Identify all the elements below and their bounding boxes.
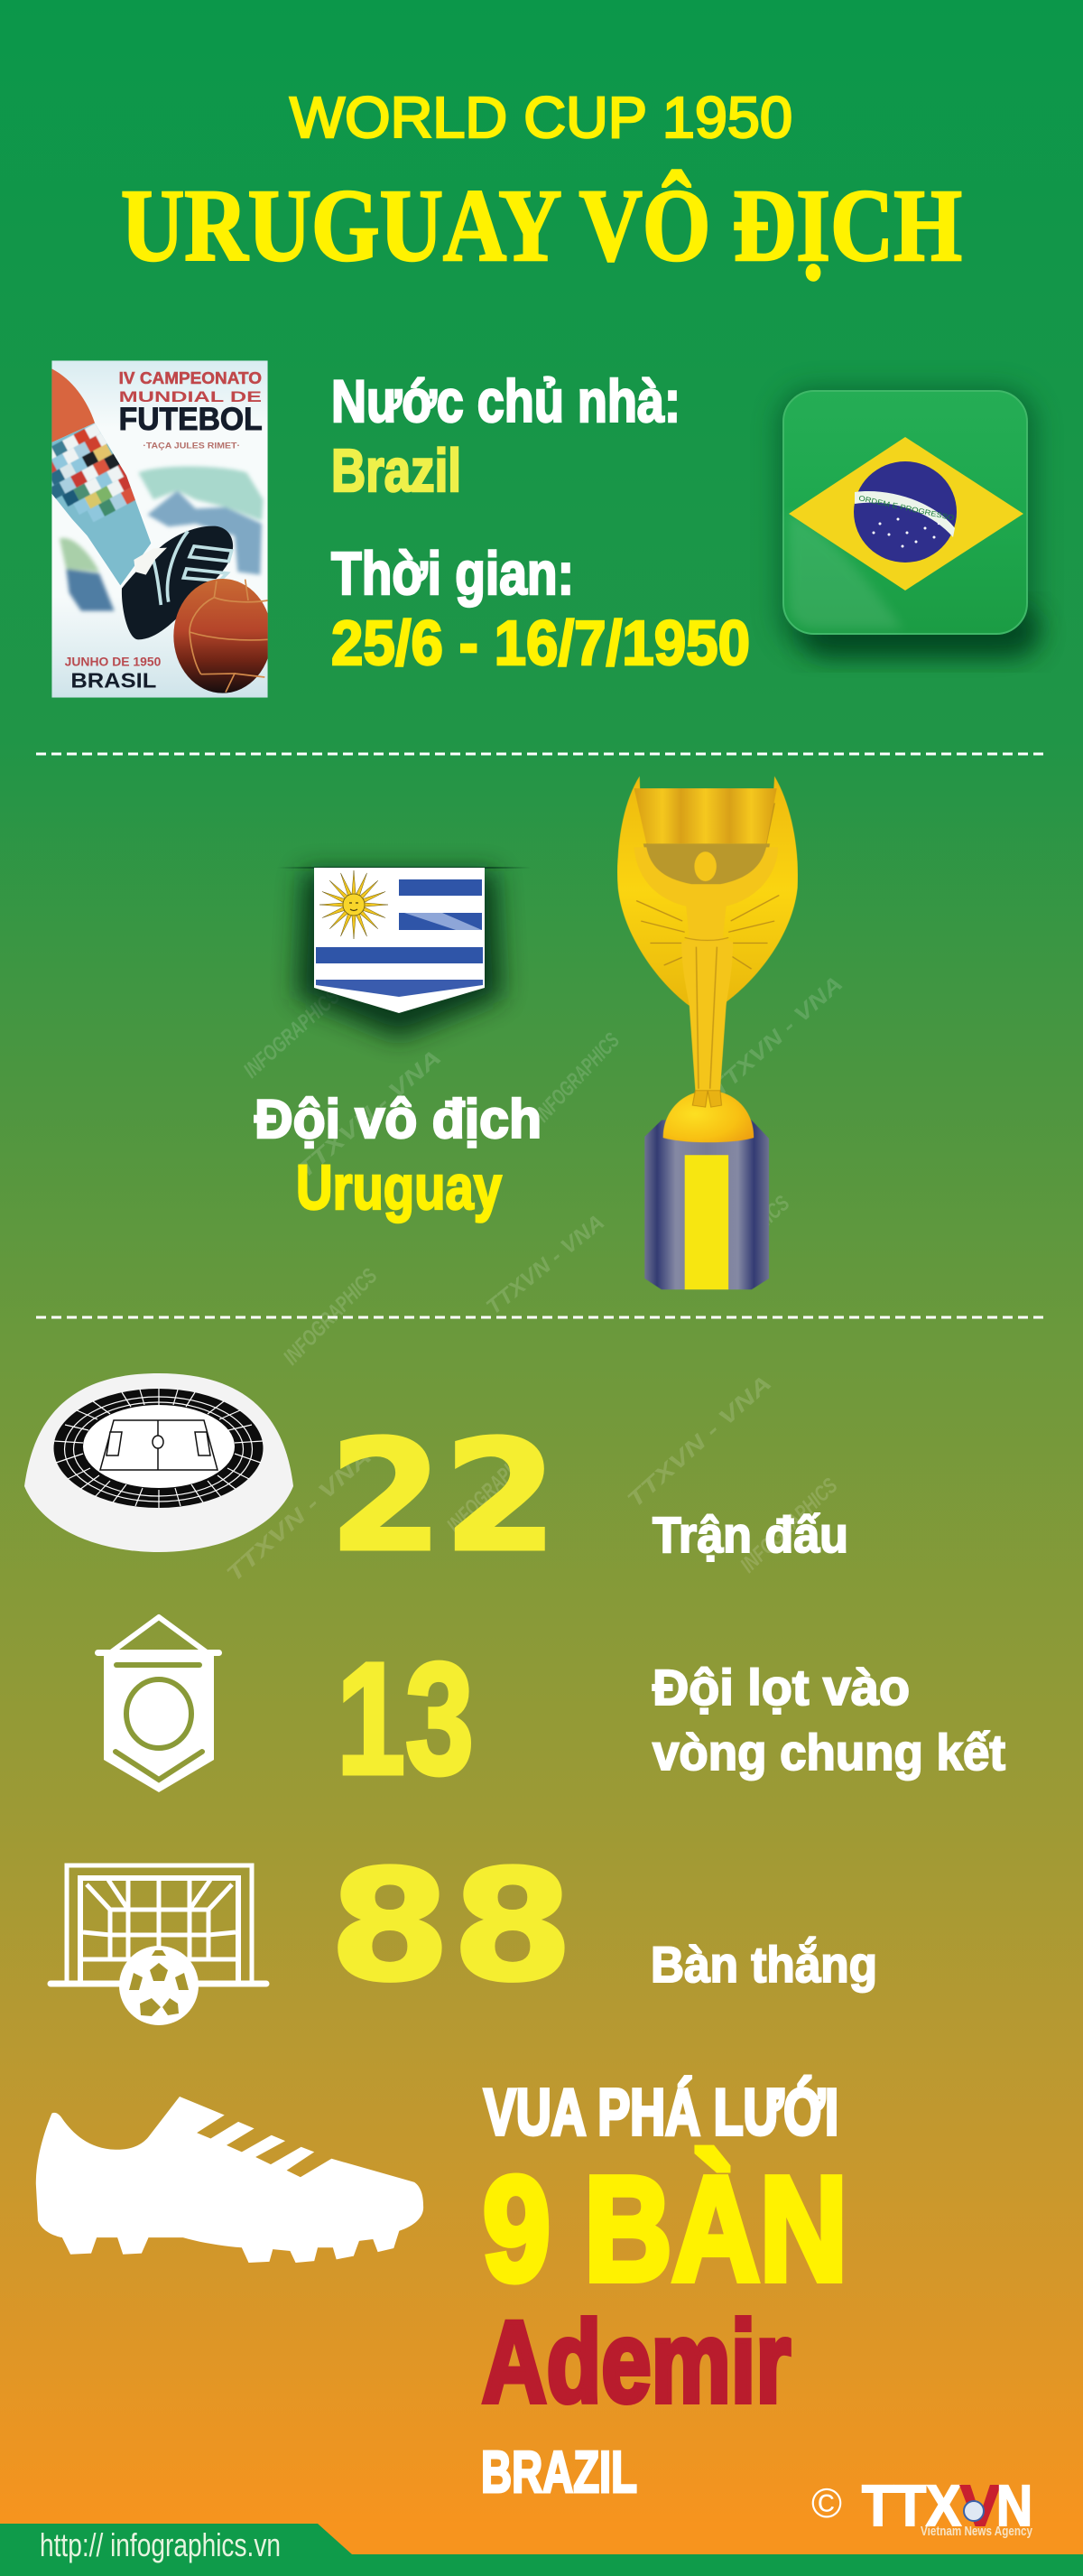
poster ball [173,579,272,693]
icon: football boot [36,2097,423,2263]
footer bar [0,2524,1083,2576]
player name: Ademir [482,2298,791,2427]
text block: champion [255,1089,542,1223]
watermarks: TTXVN - VNA [707,972,847,1102]
label: time: Thời gian: [331,540,574,608]
poster leg [51,368,95,442]
heading: top scorer: VUA PHÁ LƯỚI [484,2076,838,2149]
number: 88: 88 [329,1837,574,2016]
poster text: JUNHO DE 1950 [65,654,162,668]
label: qualified teams: Đội lọt vào [653,1659,910,1716]
dashed divider [36,753,1047,755]
watermarks: TTXVN - VNA [292,1046,446,1184]
label: qualified teams [653,1659,1005,1781]
watermarks [222,972,847,1586]
label: host country: Nước chủ nhà: [331,367,680,434]
heading: Uruguay vô địch: URUGUAY VÔ ĐỊCH [121,168,962,283]
icon: Brazil flag button [778,388,1040,657]
number: 22: 22 [329,1408,558,1586]
watermarks: INFOGRAPHICS [688,1191,794,1293]
icon: Uruguay flag ribbon [277,867,531,1038]
watermarks: INFOGRAPHICS [279,1264,382,1370]
watermarks: INFOGRAPHICS [442,1437,542,1538]
icon: pennant [95,1617,222,1792]
stat: matches [329,1408,848,1586]
footer link text: http:// infographics.vn [40,2526,281,2563]
poster text [65,368,263,693]
value: dates: 25/6 - 16/7/1950 [331,608,750,678]
trophy figure [634,847,778,1091]
label: matches: Trận đấu [653,1506,848,1563]
icon: goal and ball [51,1865,266,2025]
logo: TTXVN: V [960,2473,1000,2538]
heading: World Cup 1950: WORLD CUP 1950 [290,85,792,150]
stat: goals [329,1837,877,2016]
watermarks: TTXVN - VNA [623,1371,776,1512]
label: champion team: Đội vô địch [255,1089,542,1149]
watermarks: INFOGRAPHICS [736,1474,842,1577]
player country: BRAZIL [481,2439,637,2505]
poster boot [122,526,233,639]
stat: teams [337,1631,1005,1808]
value: Uruguay: Uruguay [296,1152,502,1223]
flag globe [854,461,957,563]
watermarks: INFOGRAPHICS [531,1028,625,1127]
poster text: FUTEBOL [119,402,263,437]
goal ball [119,1946,199,2025]
poster text: BRASIL [70,669,156,693]
trophy head [694,851,717,881]
icon: Jules Rimet trophy [617,777,798,1289]
label: goals: Bàn thắng [651,1936,877,1993]
text block: top scorer [481,2076,847,2505]
number: 13: 13 [337,1631,474,1808]
trophy cup [634,788,777,843]
icon: stadium [24,1373,293,1552]
poster text: IV CAMPEONATO [119,368,262,387]
watermarks: TTXVN - VNA [222,1445,376,1586]
dashed divider [36,1316,1047,1318]
logo: TTXVN: Vietnam News Agency [921,2524,1033,2539]
poster sock with flags [51,423,152,585]
poster: 1950 World Cup [51,360,268,698]
poster text: MUNDIAL DE [119,388,262,405]
watermarks: TTXVN - VNA [482,1210,609,1320]
value: Brazil: Brazil [331,437,461,505]
flag sun [319,870,388,939]
logo: TTXVN: TTX [862,2473,961,2538]
flag motto: ORDEM E PROGRESSO [858,494,955,522]
poster scenery [60,466,264,611]
trophy wings [617,777,798,1006]
text block: host country and dates [331,367,750,678]
stadium pitch [100,1420,218,1470]
logo: TTXVN: N [996,2473,1032,2538]
trophy base [644,1120,769,1289]
trophy dome [663,1091,754,1142]
watermarks: INFOGRAPHICS [239,984,345,1083]
label: qualified teams: vòng chung kết [653,1724,1005,1781]
title [121,85,962,283]
flag diamond [789,437,1023,591]
copyright symbol: © [811,2479,842,2526]
poster text: ·TAÇA JULES RIMET· [143,442,240,451]
logo: TTXVN [811,2473,1033,2539]
number: 9 goals: 9 BÀN [483,2146,847,2311]
